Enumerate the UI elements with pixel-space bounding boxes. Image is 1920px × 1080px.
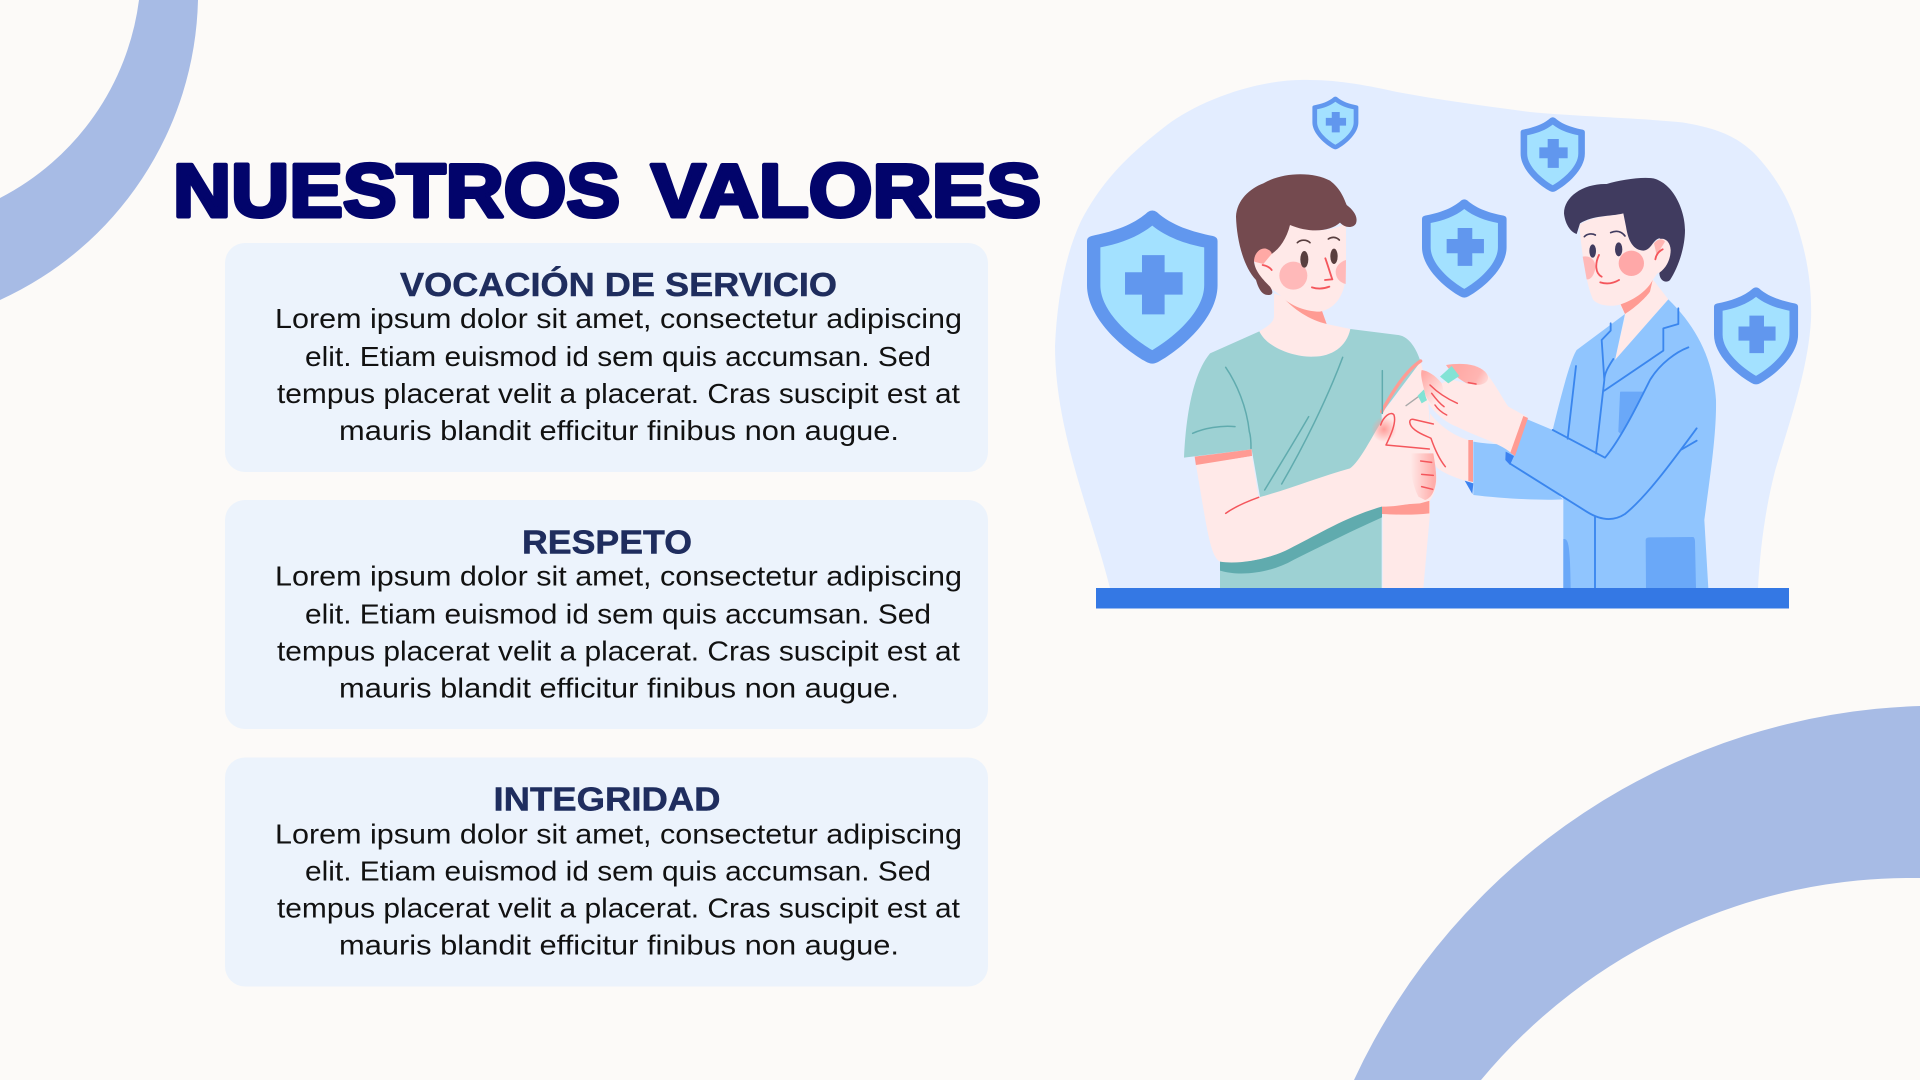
- title: VALORES: [651, 148, 1041, 232]
- doctor upper hand: [1421, 364, 1527, 455]
- icon: shield center: [1422, 199, 1507, 298]
- text block: respeto: [275, 560, 962, 704]
- text block: integridad: mauris blandit efficitur finibus non augue.: [339, 930, 899, 960]
- title: [173, 148, 1041, 232]
- text block: vocación de servicio: Lorem ipsum dolor sit amet, consectetur adipiscing: [275, 303, 962, 334]
- doctor lower hand: [1429, 413, 1469, 482]
- heading: vocación de servicio: VOCACIÓN DE SERVICIO: [400, 266, 837, 303]
- doctor upper cuff: [1505, 416, 1528, 465]
- patient head: [1236, 174, 1357, 312]
- patient gripping fingers: [1410, 453, 1436, 500]
- table bar: [1096, 588, 1789, 608]
- hands and syringe: [1371, 364, 1528, 500]
- figure: patient: [1184, 174, 1436, 588]
- text block: respeto: tempus placerat velit a placerat. Cras suscipit est at: [277, 636, 960, 666]
- icon: shield large left: [1087, 211, 1218, 364]
- pressed thumb shading: [1371, 417, 1397, 442]
- title: NUESTROS: [173, 148, 620, 232]
- text block: vocación de servicio: [275, 303, 962, 446]
- text block: integridad: elit. Etiam euismod id sem quis accumsan. Sed: [305, 856, 931, 886]
- decorative arc: top left: [0, 0, 198, 300]
- illustration: vaccination scene: [1055, 80, 1811, 609]
- panel: vocación de servicio: [225, 243, 988, 472]
- syringe upper body: [1440, 366, 1459, 383]
- icon: shield right: [1714, 287, 1798, 384]
- panel: respeto: [225, 500, 988, 729]
- text block: integridad: tempus placerat velit a placerat. Cras suscipit est at: [277, 892, 960, 924]
- icon: shield small top: [1312, 97, 1358, 149]
- hand contour lines: [1381, 383, 1476, 489]
- text block: vocación de servicio: tempus placerat velit a placerat. Cras suscipit est at: [277, 378, 960, 409]
- decorative arc: bottom right: [1354, 706, 1920, 1080]
- icon: shield top right: [1521, 117, 1585, 192]
- text block: respeto: Lorem ipsum dolor sit amet, consectetur adipiscing: [275, 560, 962, 592]
- heading: respeto: RESPETO: [522, 524, 692, 560]
- panel: integridad: [225, 758, 988, 986]
- doctor head: [1564, 178, 1685, 314]
- text block: respeto: elit. Etiam euismod id sem quis accumsan. Sed: [305, 598, 931, 630]
- text block: integridad: [275, 818, 962, 960]
- doctor lower cuff: [1465, 440, 1473, 494]
- illustration background blob: [1055, 80, 1811, 588]
- heading: integridad: INTEGRIDAD: [494, 780, 720, 818]
- text block: vocación de servicio: elit. Etiam euismod id sem quis accumsan. Sed: [305, 341, 931, 372]
- text block: respeto: mauris blandit efficitur finibus non augue.: [339, 672, 899, 704]
- figure: doctor: [1473, 178, 1716, 588]
- text block: vocación de servicio: mauris blandit efficitur finibus non augue.: [339, 415, 899, 446]
- syringe lower body and needle: [1406, 388, 1430, 406]
- text block: integridad: Lorem ipsum dolor sit amet, consectetur adipiscing: [275, 818, 962, 850]
